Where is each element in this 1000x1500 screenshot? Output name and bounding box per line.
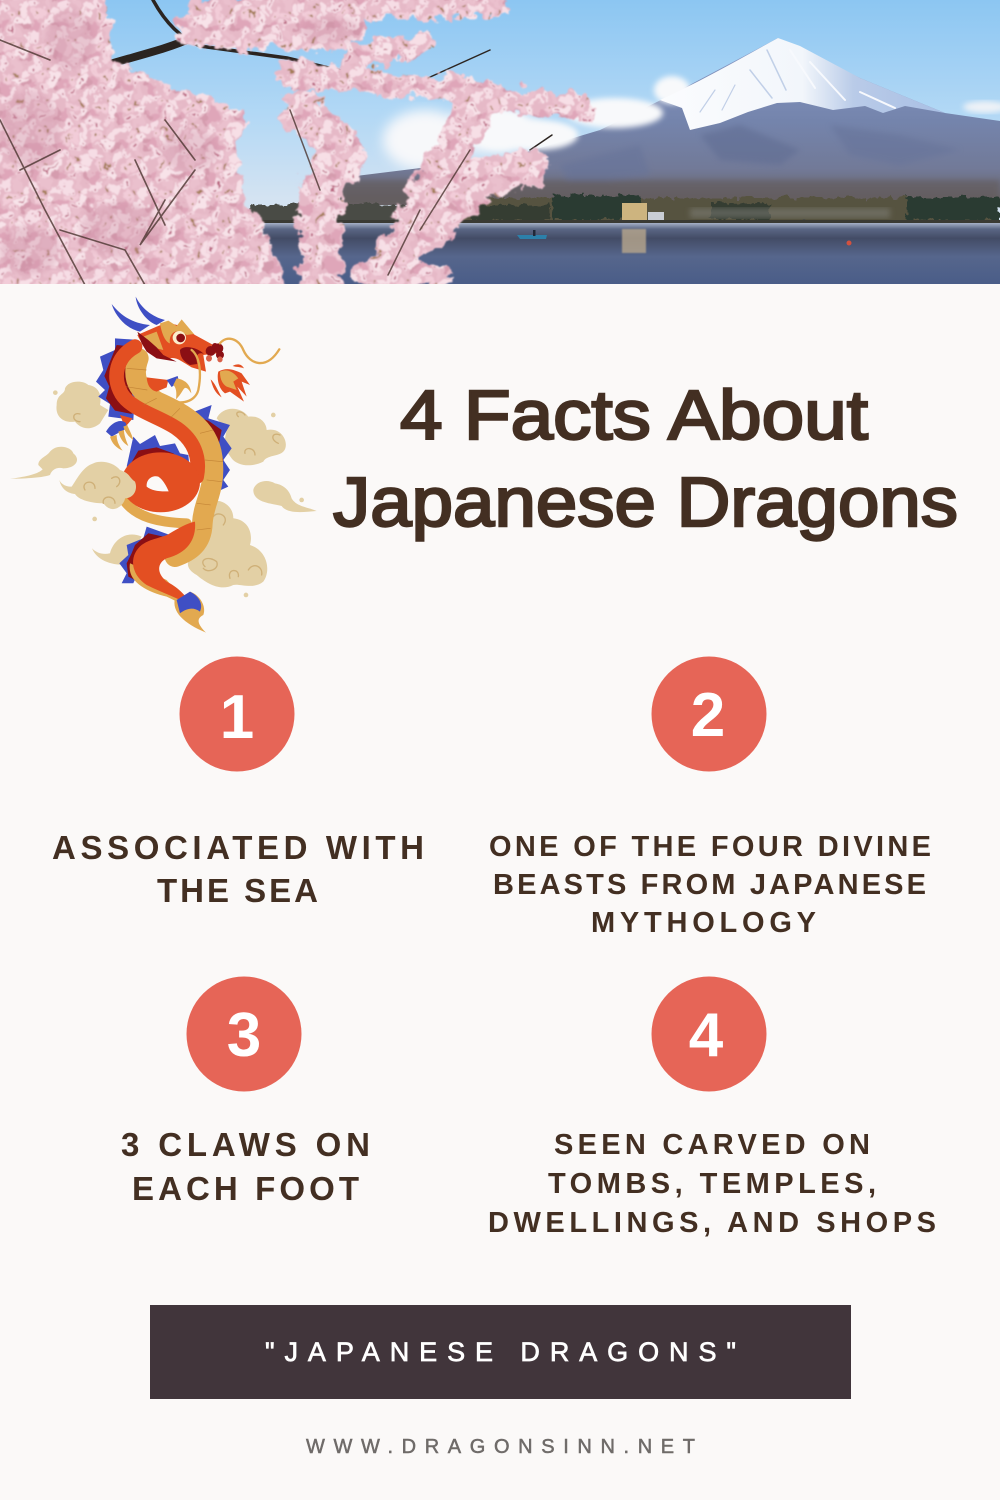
fact 2 text: ONE OF THE FOUR DIVINE (489, 831, 931, 863)
fact 2 text (489, 831, 931, 939)
fact 4 (488, 976, 936, 1239)
head (137, 324, 217, 372)
fact 4 text (488, 1129, 936, 1239)
banner (150, 1305, 851, 1399)
banner: "JAPANESE DRAGONS" (265, 1337, 736, 1367)
fact 3 text: EACH FOOT (132, 1170, 359, 1207)
blossom shading (0, 10, 360, 275)
fins (96, 338, 232, 583)
number badge 3: 3 (227, 1001, 261, 1070)
tail fin (174, 592, 206, 633)
fact 1 text (52, 829, 424, 909)
tail (130, 563, 192, 608)
cherry blossom clusters (0, 0, 580, 295)
fact 2 text: BEASTS FROM JAPANESE (493, 869, 926, 901)
treeline and village (250, 195, 1000, 223)
Mount Fuji (340, 38, 1000, 205)
title (333, 376, 958, 541)
clouds by the mountain (470, 76, 690, 150)
number badge 3 (186, 976, 302, 1092)
photo: cherry blossoms and Mount Fuji (0, 0, 1000, 295)
icon: dragon with clouds (10, 297, 317, 633)
fact 1 text: ASSOCIATED WITH (52, 829, 424, 866)
fact 4 text: TOMBS, TEMPLES, (548, 1168, 876, 1200)
fact 3 (121, 976, 370, 1207)
number badge 2 (652, 656, 766, 772)
branches through blossoms (0, 40, 470, 285)
fact 4 text: DWELLINGS, AND SHOPS (488, 1207, 936, 1239)
number badge 2: 2 (691, 681, 725, 750)
website footer: WWW.DRAGONSINN.NET (306, 1436, 695, 1458)
title: Japanese Dragons (333, 463, 958, 541)
fact 1 (52, 656, 424, 909)
lake (262, 223, 1000, 284)
fact 3 text: 3 CLAWS ON (121, 1126, 370, 1163)
title: 4 Facts About (400, 376, 868, 454)
number badge 4: 4 (689, 1001, 724, 1070)
clouds (10, 382, 317, 597)
flame (218, 369, 250, 402)
fact 2 (489, 656, 931, 939)
number badge 4 (652, 976, 766, 1092)
fact 2 text: MYTHOLOGY (591, 907, 816, 939)
fact 1 text: THE SEA (157, 872, 318, 909)
branches behind blossoms (110, 0, 552, 150)
number badge 1 (180, 656, 294, 772)
fact 3 text (121, 1126, 370, 1207)
middle cloud (59, 462, 136, 509)
horns (112, 304, 150, 332)
whiskers (220, 339, 279, 363)
fact 4 text: SEEN CARVED ON (554, 1129, 870, 1161)
body (117, 347, 213, 557)
number badge 1: 1 (220, 683, 254, 752)
arm and claws (147, 377, 168, 392)
